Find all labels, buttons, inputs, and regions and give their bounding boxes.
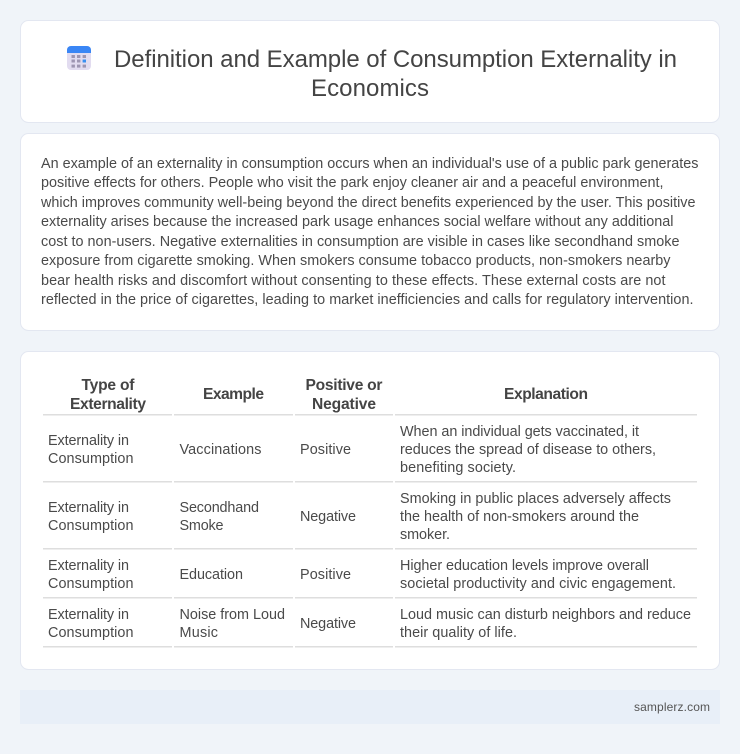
table row: education: Positive	[300, 567, 351, 583]
table row: vaccinations: reduces the spread of disease to others,	[400, 442, 656, 458]
table row: education: societal productivity and civic engagement.	[400, 576, 676, 592]
table row: secondhand smoke: Smoke	[180, 518, 224, 534]
table row: noise from loud music: Noise from Loud	[180, 607, 285, 623]
table row: vaccinations: Consumption	[48, 451, 134, 467]
table row: education: Consumption	[48, 576, 134, 592]
text block: description paragraph: cost to non-users. Negative externalities in consumption are visible in cases like secondhand smoke	[41, 234, 680, 250]
icon: calendar	[67, 46, 91, 70]
table row: secondhand smoke: Secondhand	[180, 500, 259, 516]
table row: education: Externality in	[48, 558, 129, 574]
footer bar: samplerz.com	[634, 700, 710, 714]
table row: secondhand smoke: the health of non-smokers around the	[400, 509, 639, 525]
table header: Type of	[82, 377, 135, 394]
table row: education: Higher education levels improve overall	[400, 558, 649, 574]
footer bar	[20, 690, 720, 724]
table row: vaccinations: When an individual gets vaccinated, it	[400, 424, 639, 440]
table row: vaccinations: Externality in	[48, 433, 129, 449]
table row: vaccinations: benefiting society.	[400, 460, 516, 476]
title: Definition and Example of Consumption Externality in	[114, 46, 677, 73]
table row: noise from loud music: Consumption	[48, 625, 134, 641]
table row: secondhand smoke: Consumption	[48, 518, 134, 534]
title	[114, 46, 677, 102]
text block: description paragraph: externality arises because the increased park usage enhances social welfare without any additional	[41, 214, 674, 230]
table row: noise from loud music: Music	[180, 625, 218, 641]
table header: Externality	[70, 396, 146, 413]
table row: secondhand smoke: smoker.	[400, 527, 450, 543]
table row: noise from loud music: Loud music can disturb neighbors and reduce	[400, 607, 691, 623]
table row: noise from loud music	[48, 607, 691, 641]
table row: secondhand smoke	[48, 491, 671, 543]
table header: Positive or	[306, 377, 382, 394]
title: Economics	[311, 75, 429, 102]
text block: description paragraph: exposure from cigarette smoking. When smokers consume tobacco products, non-smokers nearby	[41, 253, 671, 269]
text block: description paragraph	[40, 156, 698, 308]
table header: Example	[203, 386, 264, 403]
text block: description paragraph: reflected in the price of cigarettes, leading to market inefficiencies and calls for regulatory intervention.	[41, 292, 694, 308]
table row: vaccinations	[48, 424, 656, 476]
table header: Negative	[312, 396, 376, 413]
text block: description paragraph: An example of an externality in consumption occurs when an individual's use of a public park generates	[41, 156, 698, 172]
table row: vaccinations: Positive	[300, 442, 351, 458]
table row: secondhand smoke: Negative	[300, 509, 356, 525]
panel: title card	[20, 20, 720, 122]
table row: education: Education	[180, 567, 243, 583]
table header: Explanation	[504, 386, 588, 403]
table row: vaccinations: Vaccinations	[180, 442, 262, 458]
table row: noise from loud music: their quality of life.	[400, 625, 517, 641]
panel: table card	[20, 352, 720, 670]
table row: secondhand smoke: Externality in	[48, 500, 129, 516]
table row: secondhand smoke: Smoking in public places adversely affects	[400, 491, 671, 507]
table row: noise from loud music: Negative	[300, 616, 356, 632]
table header	[70, 377, 588, 413]
panel: description	[20, 134, 720, 330]
text block: description paragraph: positive effects for others. People who visit the park enjoy cleaner air and a peaceful environment,	[41, 175, 664, 191]
text block: description paragraph: which improves community well-being beyond the direct benefits experienced by the user. This positive	[40, 195, 696, 211]
text block: description paragraph: bear health risks and discomfort without consenting to these effects. These external costs are not	[41, 273, 666, 289]
table row: education	[48, 558, 676, 592]
table row: noise from loud music: Externality in	[48, 607, 129, 623]
